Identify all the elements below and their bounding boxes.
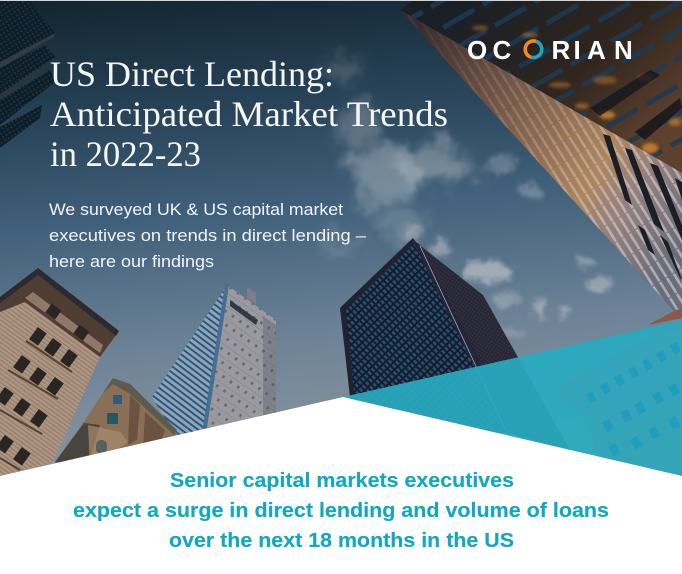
intro text: here are our findings: [49, 253, 214, 271]
intro text: [49, 201, 367, 271]
building: large glass tower, top right: [400, 1, 682, 318]
logo ring: [525, 41, 542, 58]
title: [50, 54, 448, 174]
building: dark glass block, centre: [340, 238, 570, 450]
blue windowed face: [343, 240, 507, 433]
dark mesh face: [413, 240, 570, 450]
intro text: We surveyed UK & US capital market: [49, 201, 343, 219]
key message: over the next 18 months in the US: [169, 529, 514, 552]
title: US Direct Lending:: [50, 54, 334, 94]
side face with pale windows: [400, 10, 682, 318]
logo: Ocorian: [467, 35, 633, 65]
building: tower with blue balconies, lower left: [152, 285, 276, 440]
teal triangle overlay: [343, 320, 682, 476]
window sills: [0, 341, 72, 470]
title: Anticipated Market Trends: [50, 94, 448, 134]
key message: expect a surge in direct lending and volume of loans: [73, 499, 609, 522]
building: brick building with cornice, left: [0, 268, 119, 480]
white angled panel: [0, 397, 682, 574]
windows: [0, 304, 89, 466]
logo: Ocorian: RIAN: [552, 35, 633, 65]
top edge line: [0, 0, 682, 1]
cornice: [0, 268, 119, 357]
ornate building seen through teal, right: [586, 342, 681, 456]
intro text: executives on trends in direct lending –: [49, 227, 367, 245]
logo: Ocorian: OC: [467, 35, 512, 65]
top face with dark windows: [400, 1, 682, 173]
dark vertical windows: [603, 134, 682, 280]
title: in 2022-23: [50, 134, 201, 174]
building: ornate corner building, lower left: [55, 378, 180, 480]
key message: Senior capital markets executives: [170, 469, 514, 492]
rust rooftop, right edge: [648, 309, 682, 325]
building: dark stacked tower, top left: [0, 0, 55, 148]
clouds: [327, 56, 610, 341]
key message: [73, 469, 609, 552]
